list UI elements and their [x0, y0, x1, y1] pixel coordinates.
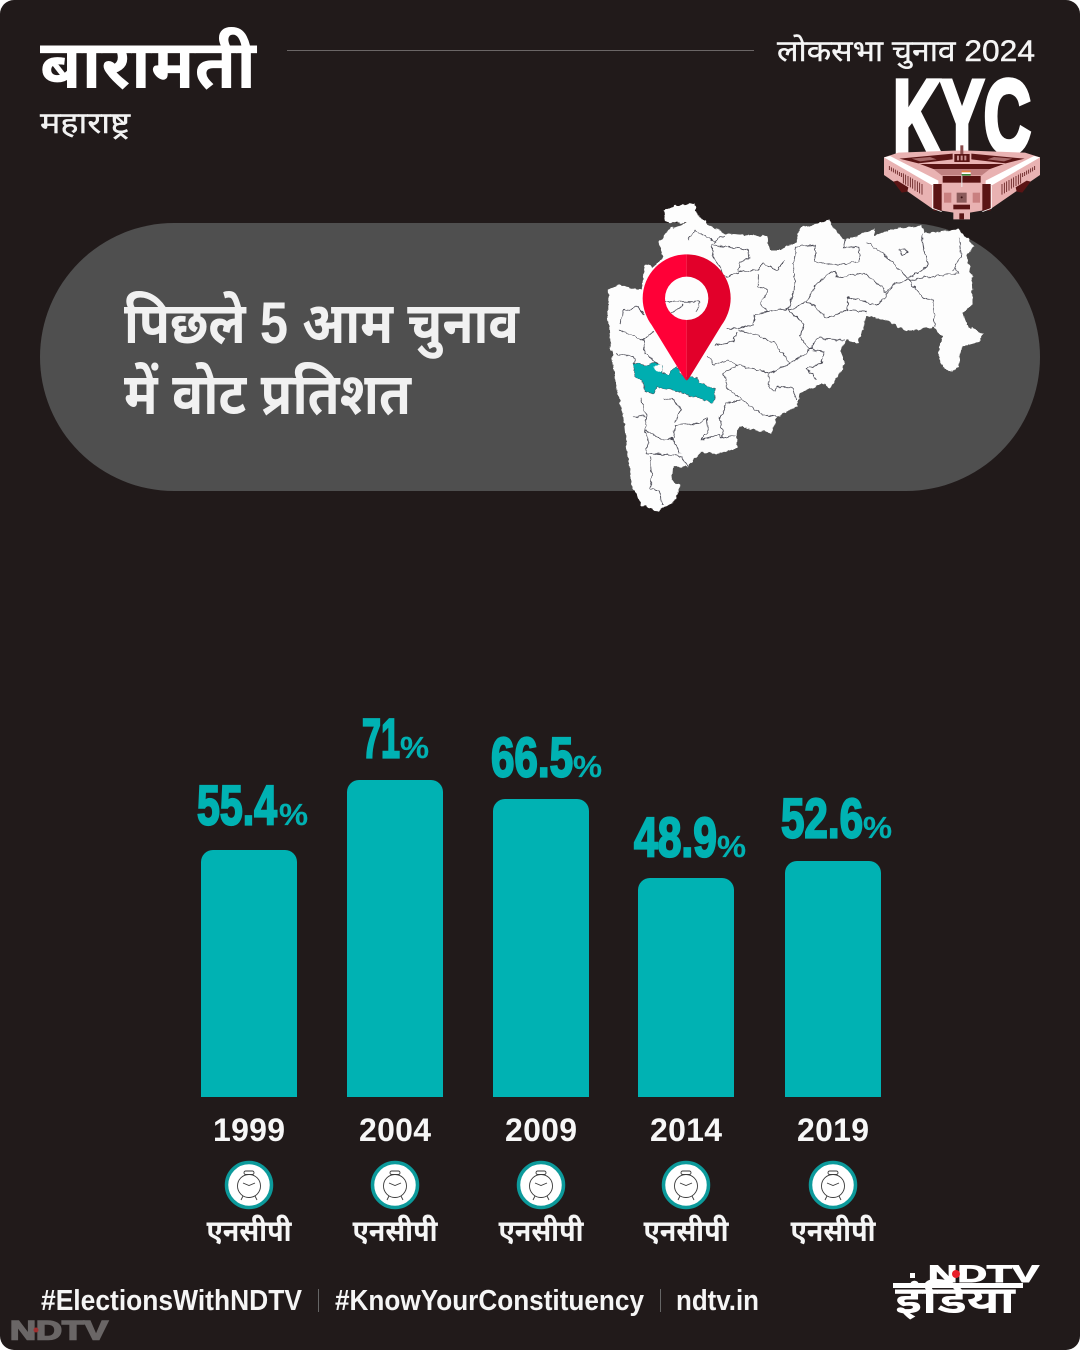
logo: NDTV India: इंडिया	[895, 1278, 1016, 1322]
value labels: 52.6	[781, 786, 863, 850]
footer hashtags: ndtv.in	[676, 1285, 759, 1317]
year labels: 1999	[213, 1112, 285, 1148]
icon: location pin	[643, 254, 731, 380]
panel heading	[124, 291, 520, 427]
panel: heading pill	[40, 223, 1040, 491]
logo: NDTV India	[893, 1261, 1039, 1322]
value labels: 66.5	[491, 726, 573, 788]
year labels	[213, 1112, 869, 1148]
logo: NDTV India: NDTV	[928, 1261, 1039, 1288]
year labels: 2014	[650, 1112, 722, 1148]
election label: लोकसभा चुनाव 2024	[777, 34, 1035, 69]
bar 2009	[493, 799, 589, 1097]
value labels: %	[400, 730, 429, 765]
party labels: एनसीपी	[206, 1214, 293, 1248]
party labels: एनसीपी	[498, 1214, 585, 1248]
footer hashtags: #KnowYourConstituency	[335, 1285, 644, 1317]
party labels: एनसीपी	[644, 1214, 730, 1248]
footer hashtags	[41, 1285, 759, 1317]
panel heading: पिछले 5 आम चुनाव	[124, 291, 520, 359]
bar 2004	[347, 780, 443, 1097]
icon: parliament building	[884, 145, 1040, 219]
footer hashtags: #ElectionsWithNDTV	[41, 1285, 303, 1317]
panel heading: में वोट प्रतिशत	[124, 362, 412, 427]
title: बारामती	[40, 27, 258, 103]
value labels: 48.9	[634, 806, 717, 868]
highlighted constituency	[633, 363, 715, 403]
value labels	[197, 706, 892, 868]
value labels: 71	[362, 706, 400, 770]
party icons: clock symbol	[226, 1162, 856, 1208]
bar 2019	[785, 861, 881, 1097]
value labels: %	[279, 797, 308, 832]
value labels: %	[573, 749, 602, 784]
year labels: 2004	[359, 1112, 431, 1148]
party labels: एनसीपी	[790, 1214, 877, 1248]
party labels: एनसीपी	[352, 1214, 439, 1248]
year labels: 2019	[797, 1112, 869, 1148]
party labels	[206, 1214, 877, 1248]
value labels: %	[717, 829, 746, 864]
value labels: 55.4	[197, 774, 277, 836]
year labels: 2009	[505, 1112, 577, 1148]
bar 1999	[201, 850, 297, 1097]
subtitle: state: महाराष्ट्र	[40, 107, 131, 140]
bar chart	[201, 780, 881, 1097]
map: Maharashtra	[608, 203, 983, 512]
value labels: %	[863, 810, 892, 845]
logo: NDTV watermark: NDTV	[10, 1316, 108, 1346]
bar 2014	[638, 878, 734, 1097]
